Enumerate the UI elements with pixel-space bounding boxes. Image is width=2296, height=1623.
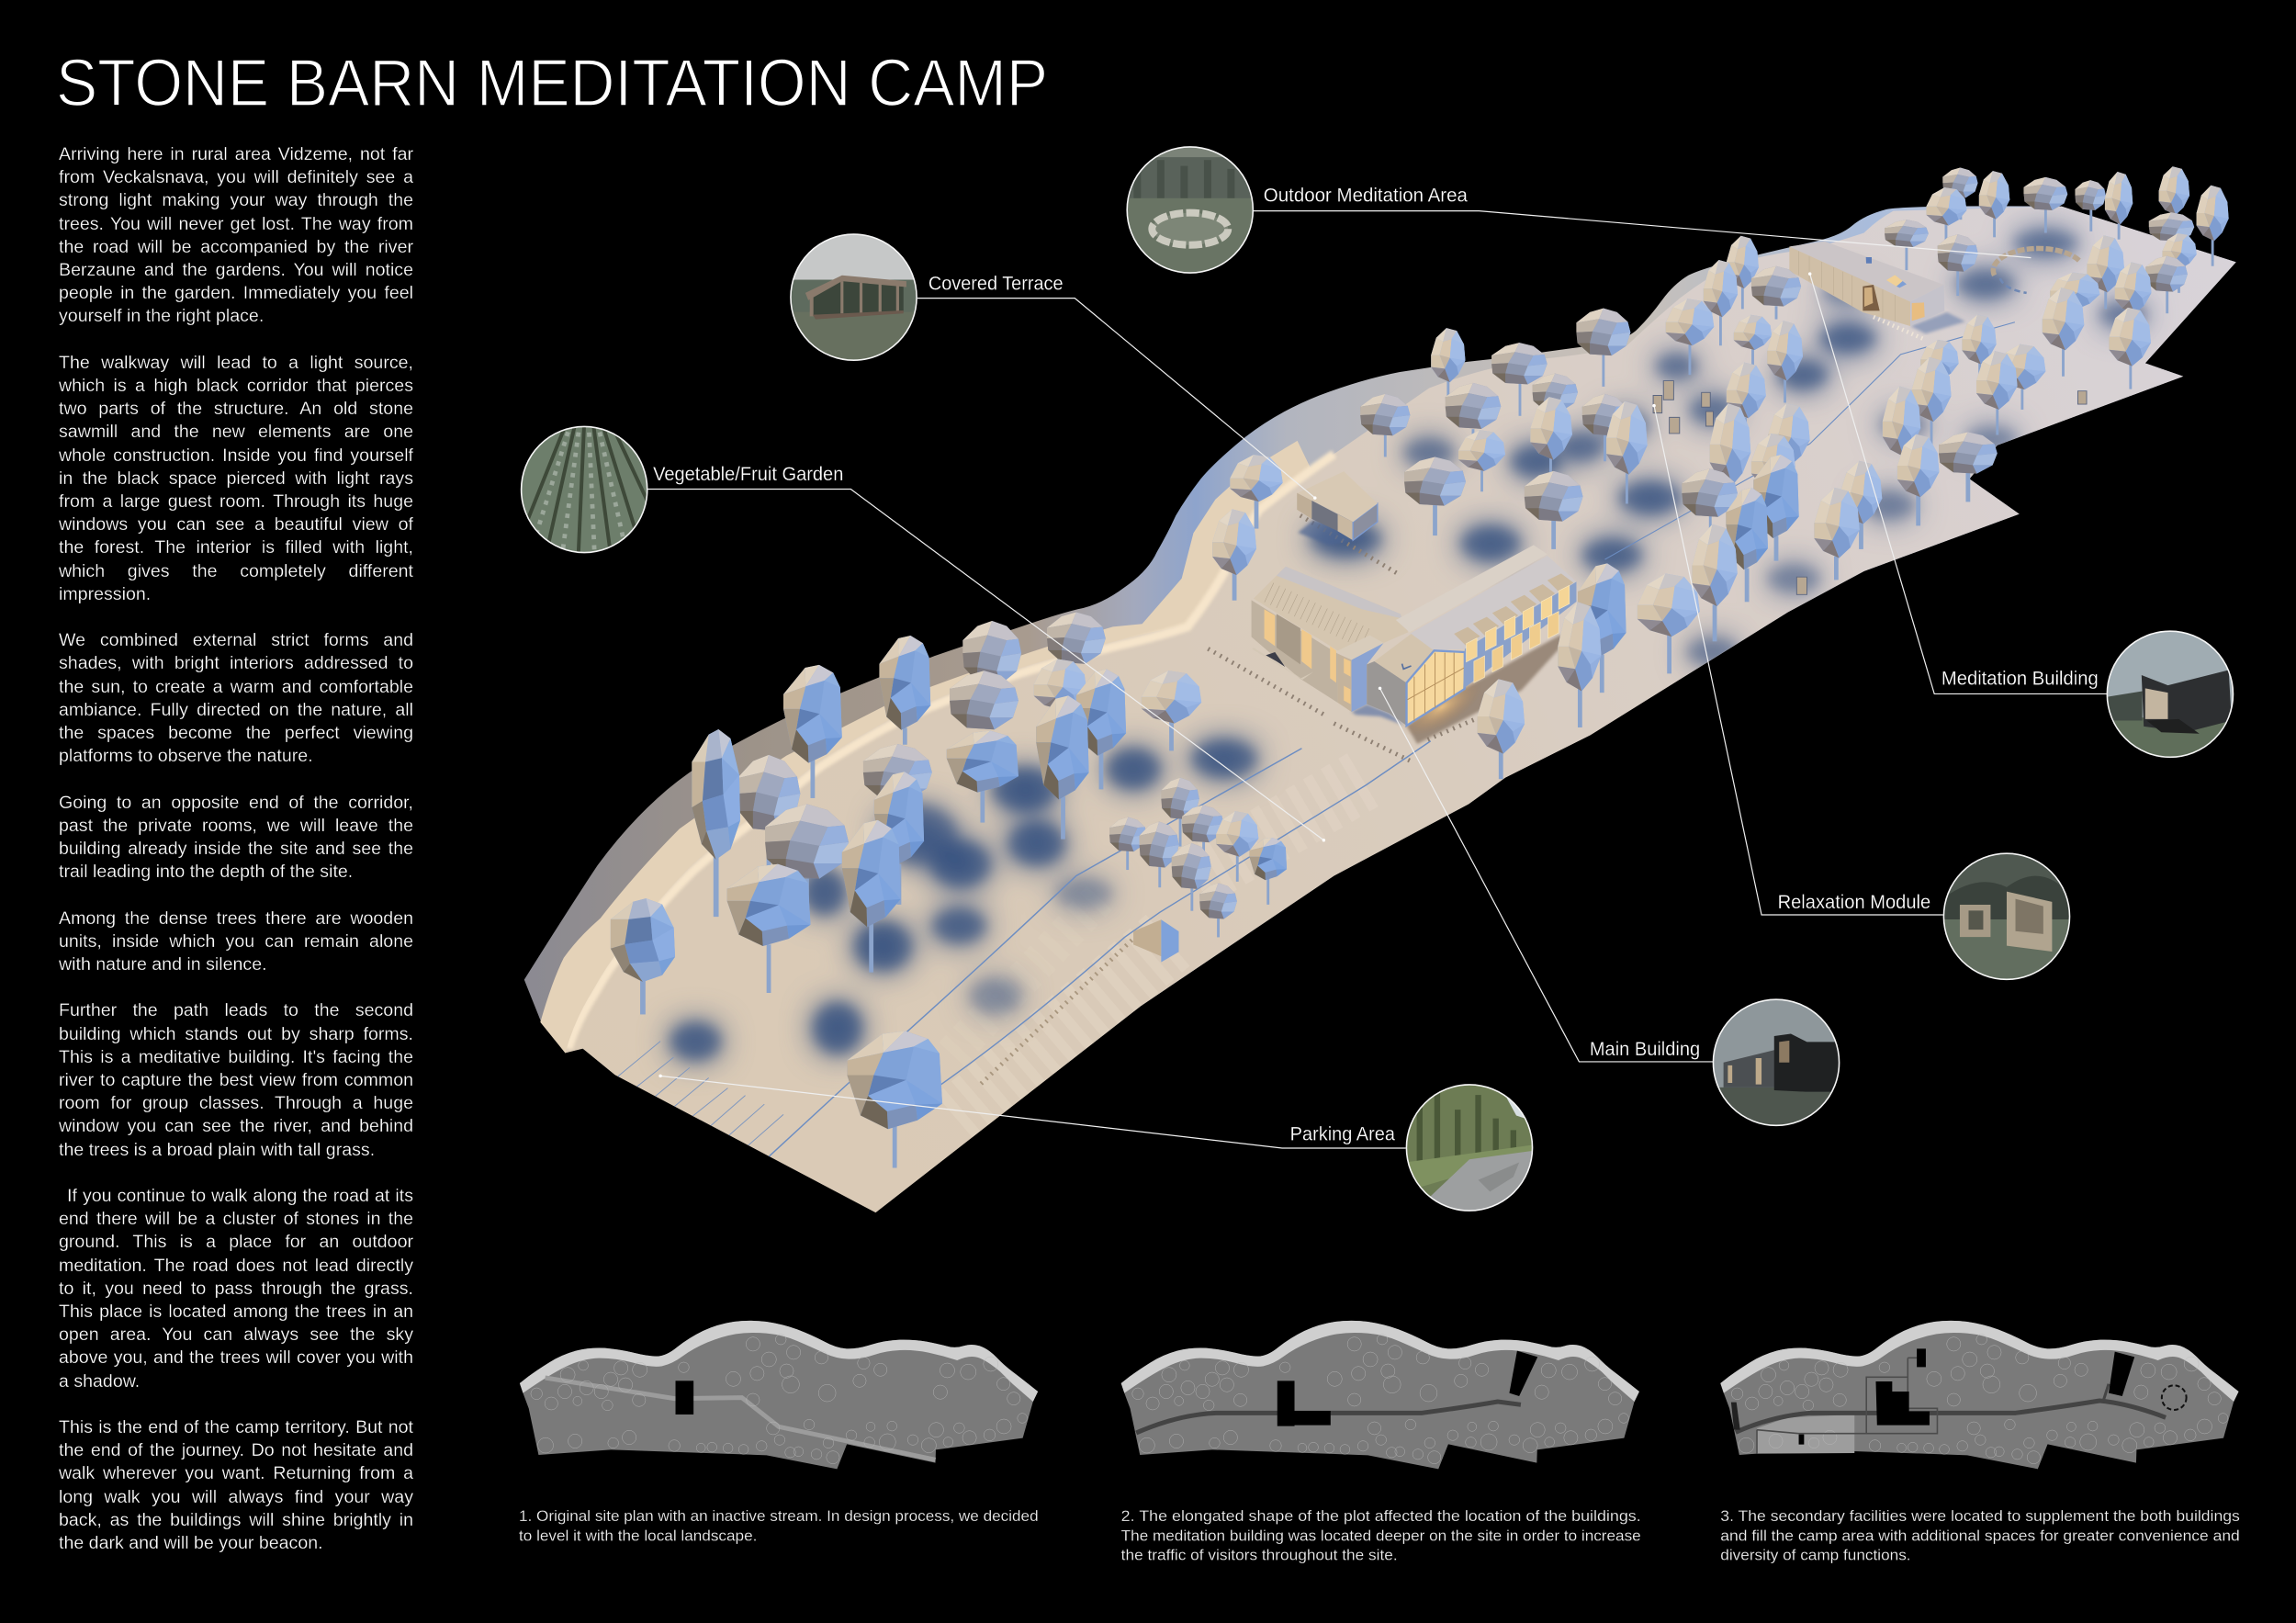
plan 1 caption: 1. Original site plan with an inactive stream. In design process, we decided <box>519 1507 1039 1525</box>
text block: paragraph 8 <box>59 1417 413 1553</box>
main building <box>1277 1381 1331 1426</box>
text block: paragraph 1: Berzaune and the gardens. You will notice <box>59 260 413 280</box>
text block: paragraph 8: the dark and will be your beacon. <box>59 1533 323 1553</box>
label: Vegetable/Fruit Garden <box>653 464 843 485</box>
meditation building <box>1509 1351 1537 1396</box>
text block: paragraph 8: walk wherever you want. Returning from a <box>59 1463 413 1483</box>
text block: paragraph 4: trail leading into the depth of the site. <box>59 862 353 882</box>
label: Outdoor Meditation Area <box>1264 186 1468 207</box>
text block: paragraph 3: the spaces become the perfect viewing <box>59 723 413 743</box>
stone circle <box>2162 1385 2187 1410</box>
title: STONE BARN MEDITATION CAMP <box>56 47 1048 120</box>
site axonometric and callouts <box>514 145 2236 1212</box>
callout: Main Building <box>1379 687 1840 1127</box>
photo: crop rows <box>520 426 648 553</box>
new wing lower roof <box>1410 556 1576 650</box>
callout: Parking Area <box>658 1075 1534 1212</box>
text block: paragraph 3: ambiance. Fully directed on the nature, all <box>59 700 413 720</box>
photo: wooden modules <box>1942 852 2071 981</box>
text block: paragraph 1: strong light making your way through the <box>59 190 413 210</box>
text block: paragraph 4 <box>59 793 413 882</box>
text block: paragraph 2: whole construction. Inside you find yourself <box>59 445 413 466</box>
parking comb ticks <box>981 515 1479 1084</box>
plan 3 caption: diversity of camp functions. <box>1720 1546 1911 1563</box>
road <box>1136 1402 1521 1433</box>
text block: paragraph 7: This place is located among the trees in an <box>59 1302 413 1322</box>
road <box>1736 1401 2166 1432</box>
callout: Covered Terrace <box>789 233 1317 500</box>
leader line <box>660 1076 1406 1148</box>
text block: paragraph 3: We combined external strict forms and <box>59 630 413 650</box>
text block: paragraph 7 <box>59 1186 413 1392</box>
text block: paragraph 8: back, as the buildings will shine brightly in <box>59 1510 413 1530</box>
text block: paragraph 6: river to capture the best view from common <box>59 1070 413 1090</box>
leader line <box>1810 274 2107 693</box>
terrain: cream slope <box>540 441 1318 1053</box>
text block: paragraph 7: a shadow. <box>59 1371 140 1392</box>
label: Parking Area <box>1290 1124 1395 1145</box>
trees <box>611 166 2229 1168</box>
window wall <box>1463 581 1576 689</box>
text block: paragraph 1: people in the garden. Immediately you feel <box>59 283 413 303</box>
roads <box>767 322 2015 1158</box>
leader line <box>917 299 1315 498</box>
photo: roadside trees <box>1405 1083 1534 1212</box>
text block: paragraph 1 <box>59 144 413 326</box>
text block: paragraph 2 <box>59 353 413 604</box>
terrain details clipped to surface <box>568 231 2146 1158</box>
plan 3 caption: and fill the camp area with additional spaces for greater convenience and <box>1720 1527 2240 1544</box>
plan 1 caption: to level it with the local landscape. <box>519 1527 757 1544</box>
text block: paragraph 6: the trees is a broad plain with tall grass. <box>59 1140 375 1160</box>
text block: paragraph 3: the sun, to create a warm and comfortable <box>59 677 413 697</box>
text block: paragraph 7: ground. This is a place for an outdoor <box>59 1232 413 1252</box>
lit window bays <box>1454 573 1573 682</box>
text block: paragraph 7: above you, and the trees will cover you with <box>59 1347 413 1368</box>
text block: paragraph 4: past the private rooms, we will leave the <box>59 816 413 836</box>
text block: paragraph 7: meditation. The road does not lead directly <box>59 1256 413 1276</box>
photo: main building <box>1712 998 1840 1127</box>
text block: paragraph 1: the road will be accompanied by the river <box>59 237 413 257</box>
text block: paragraph 2: sawmill and the new elements are one <box>59 422 413 442</box>
parking area <box>1757 1414 1854 1454</box>
text block: paragraph 6: Further the path leads to the second <box>59 1000 413 1020</box>
gable wall <box>1367 661 1407 726</box>
text block: paragraph 1: trees. You will never get lost. The way from <box>59 214 413 234</box>
plan 2 caption: 2. The elongated shape of the plot affected the location of the buildings. <box>1121 1507 1641 1525</box>
plan 2 caption: The meditation building was located deeper on the site in order to increase <box>1121 1527 1641 1544</box>
leader line <box>648 490 1323 840</box>
photo: meditation building <box>2106 630 2234 759</box>
text block: paragraph 2: in the black space pierced with light rays <box>59 468 413 489</box>
text block: paragraph 4: Going to an opposite end of the corridor, <box>59 793 413 813</box>
text block: paragraph 7: If you continue to walk along the road at its <box>67 1186 413 1206</box>
plan 1 caption <box>519 1507 1039 1544</box>
old stone wing roof <box>1254 567 1408 650</box>
building: main building <box>1252 545 1576 747</box>
text block: paragraph 2: from a large guest room. Through its huge <box>59 491 413 512</box>
stone circle <box>1993 249 2079 293</box>
text block: paragraph 6: room for group classes. Through a huge <box>59 1093 413 1113</box>
plan 2 caption: the traffic of visitors throughout the site. <box>1121 1546 1398 1563</box>
text block: paragraph 2: which is a high black corridor that pierces <box>59 376 413 396</box>
gable roof <box>1375 634 1435 682</box>
text block: paragraph 1: Arriving here in rural area Vidzeme, not far <box>59 144 413 164</box>
leader line <box>1254 211 2031 258</box>
text block: paragraph 7: end there will be a cluster of stones in the <box>59 1209 413 1229</box>
callout: Outdoor Meditation Area <box>1126 145 2031 275</box>
text block: paragraph 5: with nature and in silence. <box>59 954 267 975</box>
plan 3 caption <box>1720 1507 2240 1563</box>
label: Relaxation Module <box>1778 892 1930 913</box>
soft tree shadows <box>670 231 2146 1059</box>
text block: paragraph 8: This is the end of the camp territory. But not <box>59 1417 413 1437</box>
plan 3: secondary facilities <box>1720 1321 2239 1469</box>
text block: paragraph 8: the end of the journey. Do not hesitate and <box>59 1440 413 1460</box>
photo: stone ring <box>1126 145 1255 275</box>
buildings <box>1799 1348 1930 1445</box>
building: meditation building <box>1789 242 1965 340</box>
text block: paragraph 6 <box>59 1000 413 1160</box>
text block: paragraph 3: shades, with bright interiors addressed to <box>59 653 413 673</box>
text block: paragraph 1: from Veckalsnava, you will definitely see a <box>59 167 413 187</box>
plan 2 caption <box>1121 1507 1641 1563</box>
terrain: top surface <box>565 207 2236 1212</box>
old building <box>676 1381 693 1414</box>
text block: paragraph 5: units, inside which you can remain alone <box>59 931 413 952</box>
label: Covered Terrace <box>929 274 1064 295</box>
parking bay lines <box>618 1042 783 1146</box>
photo: covered terrace <box>789 233 918 362</box>
text block: paragraph 2: the forest. The interior is filled with light, <box>59 537 413 558</box>
text block: paragraph 5: Among the dense trees there are wooden <box>59 908 413 929</box>
text block: paragraph 3: platforms to observe the nature. <box>59 746 313 766</box>
plan 1: original site <box>520 1321 1038 1469</box>
callout: Meditation Building <box>1808 272 2234 759</box>
text block: paragraph 2: The walkway will lead to a light source, <box>59 353 413 373</box>
text block: paragraph 2: two parts of the structure. An old stone <box>59 399 413 419</box>
callout: Vegetable/Fruit Garden <box>514 423 1325 841</box>
old stone wing facade <box>1252 600 1338 703</box>
leader line <box>1654 406 1943 915</box>
light ridge along the bank <box>568 454 1334 1049</box>
terrain: outer bank <box>524 206 2236 1212</box>
text block: paragraph 2: windows you can see a beautiful view of <box>59 514 413 535</box>
new wing upper roof strip <box>1396 545 1548 632</box>
text block: paragraph 3 <box>59 630 413 766</box>
glazed gable <box>1407 650 1465 726</box>
callout: Relaxation Module <box>1652 404 2071 981</box>
text block: paragraph 6: building which stands out by sharp forms. <box>59 1024 413 1044</box>
building: covered terrace <box>1297 471 1378 545</box>
stripes: grass and parking bands <box>972 1005 1142 1137</box>
text block: paragraph 7: open area. You can always see the sky <box>59 1324 413 1345</box>
text block: paragraph 7: to it, you need to pass through the grass. <box>59 1279 413 1299</box>
text block: paragraph 2: impression. <box>59 584 151 604</box>
text block: paragraph 5 <box>59 908 413 975</box>
text block: paragraph 4: building already inside the site and see the <box>59 839 413 859</box>
plan 2: building placement <box>1121 1321 1639 1469</box>
label: Main Building <box>1590 1039 1700 1060</box>
text block: paragraph 6: window you can see the river, and behind <box>59 1116 413 1136</box>
plan 3 caption: 3. The secondary facilities were located to supplement the both buildings <box>1720 1507 2240 1525</box>
text block: paragraph 2: which gives the completely different <box>59 561 413 581</box>
warm paving and ground glow <box>1407 636 1567 744</box>
text block: paragraph 1: yourself in the right place. <box>59 306 264 326</box>
text block: paragraph 8: long walk you will always find your way <box>59 1487 413 1507</box>
text block: paragraph 6: This is a meditative building. It's facing the <box>59 1047 413 1067</box>
tall entrance box <box>1338 654 1352 712</box>
label: Meditation Building <box>1941 669 2099 690</box>
site paths <box>1757 1358 1937 1454</box>
leader line <box>1380 688 1713 1062</box>
stream <box>546 1378 936 1460</box>
relaxation modules and small hut <box>1133 381 2087 963</box>
